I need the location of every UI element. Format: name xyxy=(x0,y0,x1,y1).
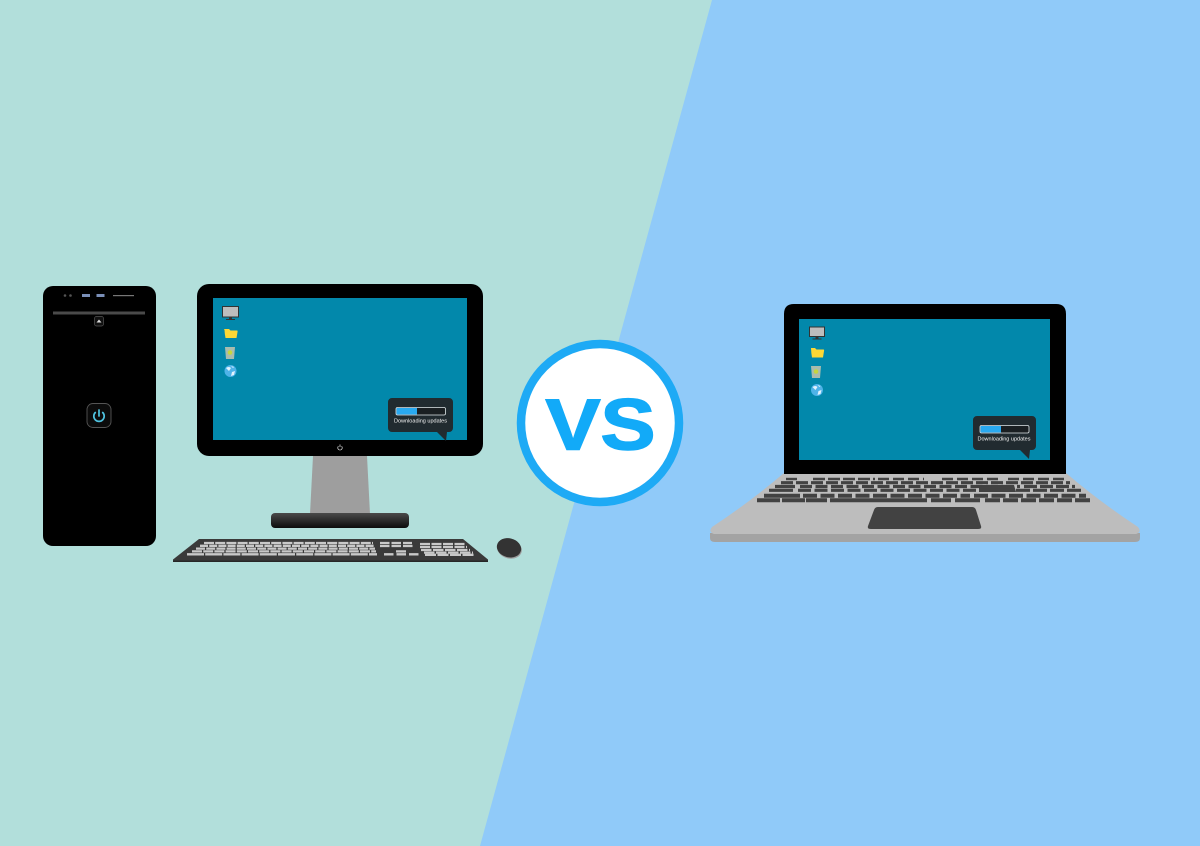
icon: computer xyxy=(810,327,824,340)
keyboard xyxy=(173,539,488,562)
icon: recycle bin xyxy=(811,366,821,378)
icon: folder xyxy=(224,329,238,338)
icon: power button xyxy=(87,404,111,428)
callout: download notification: Downloading updates xyxy=(394,418,447,424)
monitor stand xyxy=(310,456,370,514)
right background panel xyxy=(480,0,1200,846)
icon: globe xyxy=(224,365,236,377)
desktop monitor xyxy=(197,284,483,456)
laptop screen xyxy=(784,304,1066,474)
icon: folder xyxy=(810,348,824,358)
VS badge xyxy=(521,344,679,502)
monitor base xyxy=(271,513,409,528)
callout: download notification xyxy=(973,416,1036,459)
mouse xyxy=(495,536,524,561)
callout: download notification: Downloading updates xyxy=(978,436,1031,442)
laptop keyboard xyxy=(757,479,1093,500)
icon: computer xyxy=(222,306,238,320)
trackpad xyxy=(868,507,981,529)
callout: download notification xyxy=(388,398,453,441)
icon: monitor power xyxy=(338,444,342,450)
laptop base xyxy=(710,473,1140,542)
desktop tower xyxy=(43,286,156,546)
icon: recycle bin xyxy=(225,347,235,359)
VS badge: VS xyxy=(546,386,656,466)
icon: globe xyxy=(811,384,823,396)
